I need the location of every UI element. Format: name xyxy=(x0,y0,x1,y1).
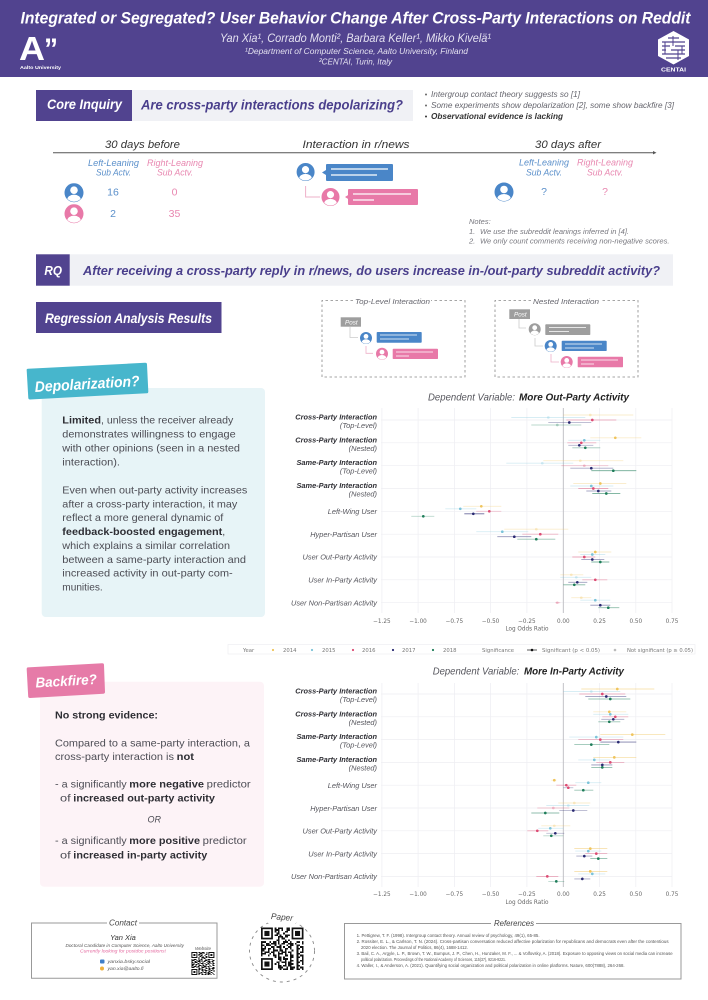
icon: email xyxy=(100,966,104,970)
references: References xyxy=(494,918,535,928)
references: political polarization. Proceedings of the National Academy of Sciences, 115(37), 9216-9221. xyxy=(361,957,506,962)
notes: We use the subreddit leanings inferred in [4]. xyxy=(480,227,629,236)
text: more positive predictor: - a significantly xyxy=(55,835,127,847)
references xyxy=(344,918,681,979)
text: feedback-boosted engagement: munities. xyxy=(62,582,103,594)
legend: 2014 xyxy=(283,648,297,654)
logo: Aalto University: ” xyxy=(44,33,58,66)
text: limited: Limited xyxy=(62,414,101,426)
interaction illustration xyxy=(297,163,418,208)
after table xyxy=(494,158,633,204)
contact card: yan.xia@aalto.fi xyxy=(106,966,144,972)
notes: We only count comments receiving non-negative scores. xyxy=(480,237,670,246)
row labels: User Non-Partisan Activity xyxy=(291,872,378,881)
text: limited: , unless the receiver already xyxy=(101,414,234,426)
icon: bluesky xyxy=(100,960,104,964)
row labels: Left-Wing User xyxy=(328,507,378,516)
chart title xyxy=(428,392,630,404)
header banner xyxy=(0,0,708,77)
contact card: Doctoral Candidate in Computer Science, Aalto University xyxy=(66,943,185,948)
logo: Aalto University: Aalto University xyxy=(20,65,62,70)
text: no strong evidence: cross-party interaction is xyxy=(55,751,174,763)
x axis: 0.25 xyxy=(593,892,606,898)
research question banner xyxy=(36,254,673,286)
background bullets: Some experiments show depolarization [2], some show backfire [3] xyxy=(431,101,675,110)
affiliations xyxy=(245,46,468,66)
logo: CENTAI: CENTAI xyxy=(661,68,687,74)
timeline: Interaction in r/news xyxy=(302,139,410,151)
x axis: Log Odds Ratio xyxy=(505,626,549,632)
x axis: −0.75 xyxy=(446,619,463,625)
chart: more out-party activity xyxy=(291,392,679,632)
x axis: 0.50 xyxy=(629,892,643,898)
legend: 2017 xyxy=(402,648,415,654)
background bullets: Observational evidence is lacking xyxy=(431,112,563,121)
references: 4. Waller, I., & Anderson, A. (2021). Quantifying social organization and political polarization in online platforms. Nature, 600(7888), 264-268. xyxy=(357,963,625,968)
qr: website xyxy=(191,952,214,975)
row labels: Same-Party Interaction xyxy=(296,481,377,490)
x axis: −0.50 xyxy=(482,892,500,898)
after table: Sub Actv. xyxy=(526,168,562,178)
tag: backfire xyxy=(27,663,105,698)
before table: Right-Leaning xyxy=(147,158,203,168)
contact card: Website xyxy=(195,946,211,952)
background bullets: Intergroup contact theory suggests so [1] xyxy=(431,90,581,99)
row labels: (Nested) xyxy=(349,490,378,498)
contact card: yanxia.bsky.social xyxy=(106,959,151,965)
row labels: Cross-Party Interaction xyxy=(295,686,377,696)
row labels: (Top-Level) xyxy=(340,695,378,704)
chart title: More Out-Party Activity xyxy=(519,392,630,404)
notes: 2. xyxy=(468,237,475,246)
text: feedback-boosted engagement: , xyxy=(222,526,225,538)
core inquiry banner: Are cross-party interactions depolarizing? xyxy=(140,96,403,112)
text: limited: demonstrates willingness to engage xyxy=(62,428,236,440)
x axis: 0.50 xyxy=(629,619,643,625)
research question banner: After receiving a cross-party reply in r/news, do users increase in-/out-party subreddit activity? xyxy=(82,263,660,278)
references: 1. Pettigrew, T. F. (1998). Intergroup contact theory. Annual review of psychology, 49(1), 65-85. xyxy=(357,933,540,938)
legend xyxy=(228,644,695,654)
x axis: −0.50 xyxy=(482,619,500,625)
legend: 2018 xyxy=(443,648,457,654)
tag: depolarization: Depolarization? xyxy=(34,373,140,396)
legend: Year xyxy=(242,648,255,654)
timeline xyxy=(53,139,656,154)
chart: more in-party activity xyxy=(291,666,679,906)
regression heading: Regression Analysis Results xyxy=(45,310,212,326)
row labels: User In-Party Activity xyxy=(308,576,378,584)
text: feedback-boosted engagement: Even when out-party activity increases xyxy=(62,484,247,496)
x axis xyxy=(373,619,679,632)
legend: 2015 xyxy=(322,648,335,654)
paper badge with qr: Paper xyxy=(271,911,295,923)
chart title: More In-Party Activity xyxy=(524,666,625,678)
text: more positive predictor: predictor xyxy=(203,835,247,847)
row labels: User In-Party Activity xyxy=(308,849,378,858)
text: more negative predictor: of xyxy=(60,793,71,805)
row labels: (Nested) xyxy=(349,444,378,453)
logo: Aalto University xyxy=(19,30,62,70)
before table: 16 xyxy=(107,186,119,198)
panel: backfire xyxy=(27,663,264,887)
x axis: −1.25 xyxy=(373,892,391,898)
text: feedback-boosted engagement: feedback-boosted engagement xyxy=(62,526,223,538)
chart title xyxy=(433,666,625,678)
text: feedback-boosted engagement: increased activity in out-party com- xyxy=(62,568,233,580)
background bullets xyxy=(425,90,675,121)
text: more negative predictor xyxy=(55,779,251,805)
x axis: −1.25 xyxy=(373,619,391,625)
row labels: Same-Party Interaction xyxy=(296,732,377,741)
text: feedback-boosted engagement: between a same-party interaction and xyxy=(62,554,246,566)
text: more negative predictor: increased out-party activity xyxy=(73,793,215,805)
regression heading xyxy=(36,302,222,333)
affiliations: ²CENTAI, Turin, Italy xyxy=(319,56,393,66)
before table: 35 xyxy=(169,208,180,220)
diagram: nested interaction: Nested Interaction xyxy=(533,297,599,306)
text: limited: interaction). xyxy=(62,456,120,468)
panel: depolarization xyxy=(27,363,265,617)
row labels: Hyper-Partisan User xyxy=(310,804,378,813)
text: no strong evidence: Compared to a same-party interaction, a xyxy=(55,738,250,750)
before table: Left-Leaning xyxy=(88,158,139,168)
references: 2020 election. The Journal of Politics, 86(4), 1688-1412. xyxy=(361,945,468,950)
notes: 1. xyxy=(469,227,475,236)
before table: 0 xyxy=(172,186,178,198)
paper badge with qr xyxy=(250,911,314,982)
tag: backfire: Backfire? xyxy=(35,671,98,690)
row labels: Cross-Party Interaction xyxy=(295,412,377,422)
x axis: −0.25 xyxy=(518,619,536,625)
text: more negative predictor: more negative xyxy=(129,779,204,791)
x axis: −1.00 xyxy=(409,619,427,625)
row labels: Hyper-Partisan User xyxy=(310,530,378,539)
references: 3. Bail, C. A., Argyle, L. P., Brown, T. W., Bumpus, J. P., Chen, H., Hunzaker, M. F., ... & Volfovsky, A. (2018). Exposure to opposing views on social media can increase xyxy=(357,951,673,956)
diagram: top-level interaction xyxy=(322,297,465,377)
text: more positive predictor: increased in-party activity xyxy=(73,849,207,861)
after table: ? xyxy=(602,186,608,198)
legend: Not significant (p ≥ 0.05) xyxy=(627,648,693,654)
x axis: 0.00 xyxy=(557,892,570,898)
contact card: Currently looking for postdoc positions! xyxy=(80,948,167,954)
text: or: OR xyxy=(148,815,162,825)
contact card: Contact xyxy=(109,918,138,928)
references: 2. Rossiter, E. L., & Carlson, T. N. (2024). Cross-partisan conversation reduced affective polarization for republicans and democrats even after the contentious xyxy=(357,939,669,944)
row labels: (Top-Level) xyxy=(340,741,378,750)
chart title: Dependent Variable: xyxy=(433,666,519,678)
after table: ? xyxy=(541,186,547,198)
diagram: nested interaction xyxy=(495,297,638,377)
after table: Right-Leaning xyxy=(577,158,633,168)
tag: depolarization xyxy=(27,363,148,400)
before table: Sub Actv. xyxy=(157,168,193,178)
text: no strong evidence: No strong evidence: xyxy=(55,709,158,721)
contact card xyxy=(32,918,217,978)
contact card: Yan Xia xyxy=(110,933,136,942)
row labels: (Nested) xyxy=(349,763,378,772)
row labels: User Out-Party Activity xyxy=(303,553,378,562)
row labels xyxy=(291,412,378,607)
chart title: Dependent Variable: xyxy=(428,392,515,404)
research question banner: RQ xyxy=(44,263,62,278)
x axis: −1.00 xyxy=(409,892,427,898)
row labels: Cross-Party Interaction xyxy=(295,435,377,444)
text: limited: with other opinions (seen in a nested xyxy=(61,442,240,454)
row labels: Cross-Party Interaction xyxy=(295,709,377,718)
row labels: Left-Wing User xyxy=(328,781,378,790)
diagram: top-level interaction: Post xyxy=(345,320,358,326)
text: more negative predictor: - a significantly xyxy=(55,779,127,791)
text: no strong evidence: not xyxy=(177,751,195,763)
text: feedback-boosted engagement xyxy=(61,484,247,594)
row labels: (Nested) xyxy=(349,718,378,727)
before table xyxy=(64,158,203,225)
authors: Yan Xia¹, Corrado Monti², Barbara Keller¹, Mikko Kivelä¹ xyxy=(220,31,491,45)
text: more negative predictor: predictor xyxy=(207,779,251,791)
x axis xyxy=(373,892,679,906)
x axis: 0.75 xyxy=(666,619,679,625)
core inquiry banner xyxy=(36,90,413,121)
text: feedback-boosted engagement: after a cross-party interaction, it may xyxy=(62,498,238,510)
row labels xyxy=(291,686,378,881)
notes xyxy=(468,217,670,246)
text: limited xyxy=(61,414,240,468)
before table: Sub Actv. xyxy=(96,168,131,178)
text: feedback-boosted engagement: reflect a more general dynamic of xyxy=(62,512,223,524)
text: more positive predictor: more positive xyxy=(129,835,200,847)
x axis: 0.00 xyxy=(557,619,570,625)
x axis: 0.25 xyxy=(593,619,606,625)
text: no strong evidence xyxy=(55,709,250,763)
legend: 2016 xyxy=(362,648,376,654)
legend: Significant (p < 0.05) xyxy=(542,648,600,654)
diagram: top-level interaction: Top-Level Interaction xyxy=(355,297,430,306)
logo: Aalto University: A xyxy=(19,30,45,67)
x axis: −0.25 xyxy=(518,892,536,898)
after table: Left-Leaning xyxy=(519,158,569,168)
logo: CENTAI xyxy=(658,31,689,74)
x axis: 0.75 xyxy=(666,892,679,898)
coefficient points xyxy=(563,688,654,700)
text: feedback-boosted engagement: which explains a similar correlation xyxy=(61,540,230,552)
legend: Significance xyxy=(482,648,514,654)
row labels: User Non-Partisan Activity xyxy=(291,598,378,607)
row labels: User Out-Party Activity xyxy=(303,827,378,836)
diagram: nested interaction: Post xyxy=(514,312,527,318)
text: more positive predictor: of xyxy=(60,849,71,861)
row labels: Same-Party Interaction xyxy=(296,755,377,764)
x axis: −0.75 xyxy=(446,892,463,898)
timeline: 30 days after xyxy=(535,139,602,151)
after table: Sub Actv. xyxy=(587,168,623,178)
notes: Notes: xyxy=(469,217,491,226)
affiliations: ¹Department of Computer Science, Aalto University, Finland xyxy=(245,46,468,56)
timeline: 30 days before xyxy=(105,139,180,151)
row labels: (Top-Level) xyxy=(340,421,378,430)
row labels: Same-Party Interaction xyxy=(296,458,377,467)
before table: 2 xyxy=(110,208,116,220)
row labels: (Top-Level) xyxy=(340,467,378,476)
core inquiry banner: Core Inquiry xyxy=(47,96,123,112)
text: more positive predictor xyxy=(55,835,247,861)
coefficient points xyxy=(511,414,633,426)
x axis: Log Odds Ratio xyxy=(505,900,549,906)
qr: paper xyxy=(261,928,304,970)
